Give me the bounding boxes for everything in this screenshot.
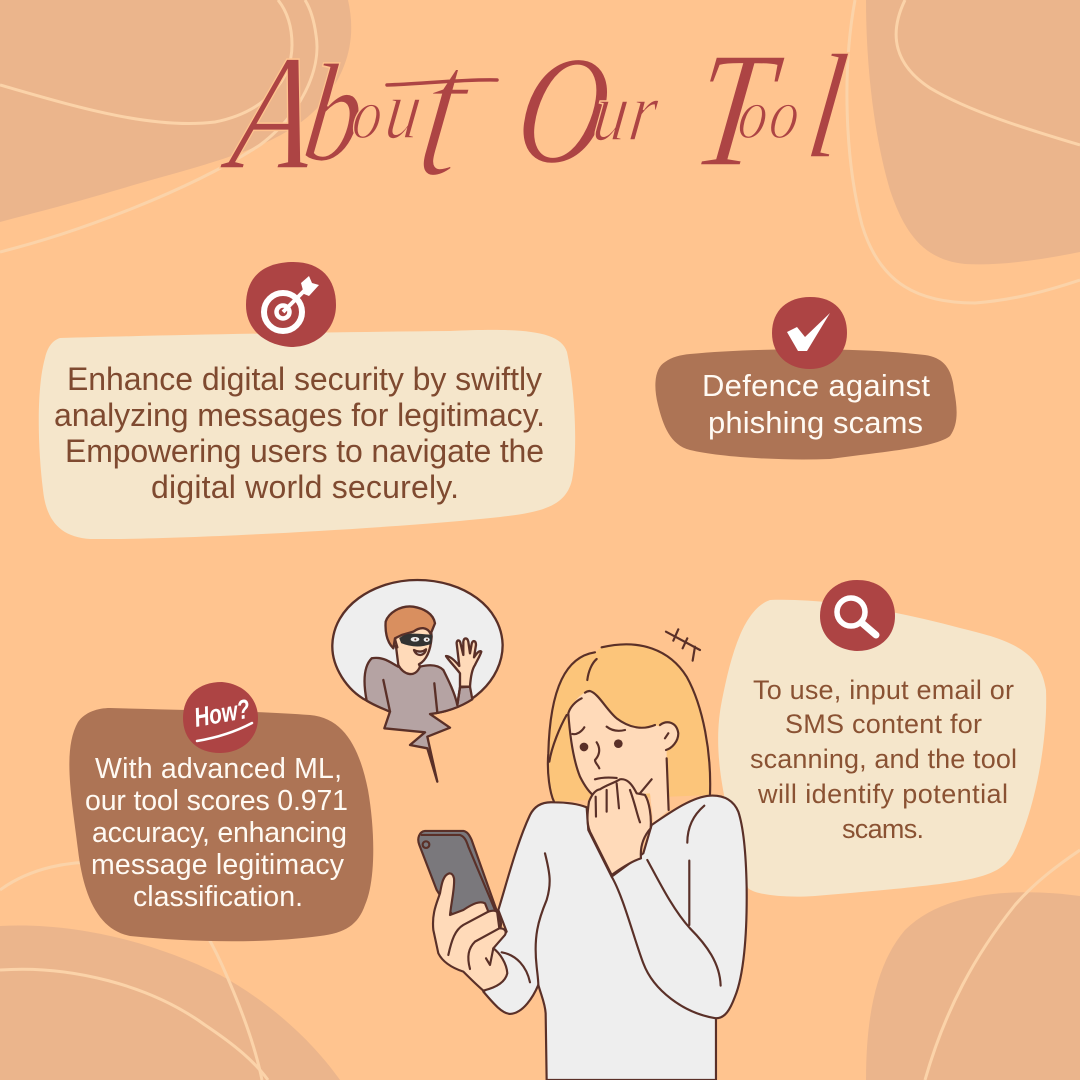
title: u	[588, 64, 635, 159]
illustration: thief speech bubble	[332, 580, 503, 782]
title: T	[684, 18, 791, 201]
text: mission	[54, 361, 545, 505]
title: l	[799, 23, 856, 190]
text: how to use: scams.	[842, 814, 924, 844]
text: how to use	[750, 675, 1017, 844]
title: b	[296, 35, 374, 191]
icon: how question: How?	[192, 694, 252, 733]
hand holding phone	[433, 873, 507, 991]
text: mission: Empowering users to navigate the	[65, 433, 544, 469]
title	[212, 7, 858, 217]
icon: check mark	[772, 297, 847, 369]
title: o	[765, 75, 805, 154]
text: accuracy	[85, 753, 348, 913]
icon: how question	[183, 682, 258, 753]
illustration: worried woman with phone	[418, 629, 747, 1080]
panel: how to use	[718, 580, 1046, 897]
title: o	[734, 75, 773, 154]
panel: accuracy	[69, 682, 373, 941]
face and neck	[568, 691, 678, 823]
title: A	[214, 21, 329, 204]
text: accuracy: With advanced ML,	[95, 753, 342, 785]
title: u	[380, 62, 428, 157]
title: r	[624, 64, 681, 159]
text: mission: Enhance digital security by swiftly	[67, 361, 542, 397]
text: defence: phishing scams	[708, 405, 923, 440]
text: accuracy: message legitimacy	[91, 849, 345, 881]
text: how to use: To use, input email or	[753, 675, 1014, 705]
title: t	[407, 7, 517, 217]
text: mission: analyzing messages for legitimacy.	[54, 397, 545, 433]
icon: magnifier	[820, 580, 895, 651]
title: o	[348, 75, 388, 154]
panel: mission statement	[39, 262, 575, 539]
title: O	[507, 24, 621, 196]
text: defence	[702, 368, 930, 440]
text: accuracy: classification.	[133, 881, 303, 913]
text: how to use: will identify potential	[757, 779, 1008, 809]
phone	[418, 831, 501, 948]
hand at chin	[587, 779, 651, 875]
text: mission: digital world securely.	[151, 469, 459, 505]
text: accuracy: accuracy, enhancing	[92, 817, 347, 849]
panel: defence	[655, 297, 957, 459]
hair	[548, 644, 710, 802]
text: how to use: scanning, and the tool	[750, 744, 1017, 774]
text: accuracy: our tool scores 0.971	[85, 785, 348, 817]
icon: target	[246, 262, 336, 347]
sweater	[483, 796, 747, 1080]
text: defence: Defence against	[702, 368, 930, 403]
text: how to use: SMS content for	[785, 709, 982, 739]
